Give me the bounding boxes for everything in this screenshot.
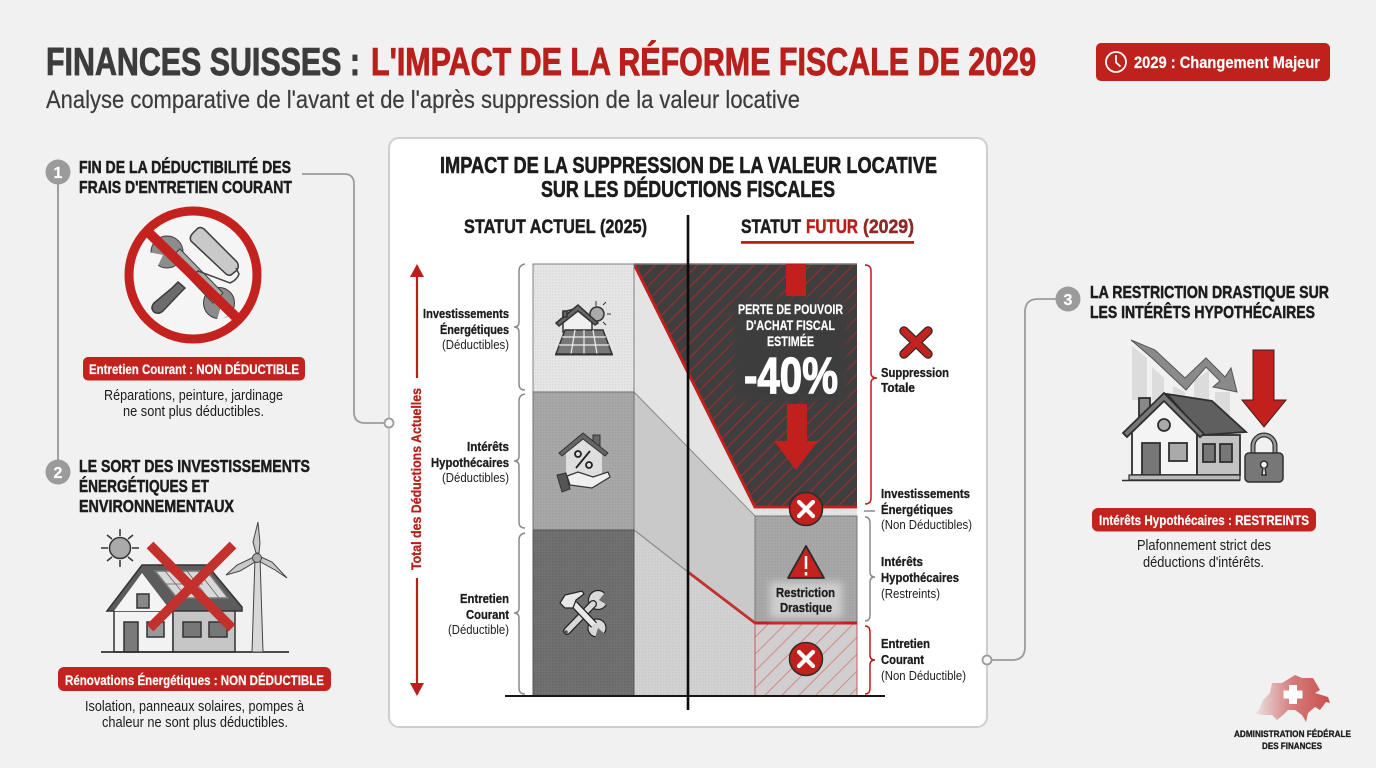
roller	[190, 228, 238, 275]
hammer with wrench end	[588, 619, 606, 637]
description step 2: chaleur ne sont plus déductibles.	[102, 715, 288, 731]
wrench with round end	[588, 590, 608, 610]
label: entretien courant futur: Entretien	[881, 636, 930, 651]
logo: administration federale des finances	[1234, 675, 1351, 752]
axis: total des deductions actuelles: Total des Déductions Actuelles	[409, 388, 424, 570]
icon: hammer and wrench	[560, 590, 612, 642]
column heading: statut futur	[741, 216, 914, 244]
icon: house with percent in hand	[557, 433, 610, 492]
step number 1	[46, 160, 70, 184]
panel: step 3 interets hypothecaires	[1056, 282, 1329, 571]
label: restriction drastique: Restriction	[776, 585, 835, 600]
panel: step 2 investissements energetiques	[46, 456, 331, 731]
label: interets hypothecaires futur	[881, 554, 959, 601]
badge: 2029 changement majeur	[1096, 43, 1330, 81]
flow band: entretien	[634, 530, 755, 696]
label: entretien courant futur: Courant	[881, 652, 925, 667]
icon: x badge investissements	[790, 492, 822, 526]
description step 2: Isolation, panneaux solaires, pompes à	[85, 699, 305, 715]
label: restriction drastique: Drastique	[780, 600, 832, 615]
left braces	[514, 264, 525, 694]
description step 3: déductions d'intérêts.	[1143, 555, 1264, 571]
connector from step 1 to chart	[302, 174, 394, 428]
title	[46, 40, 1036, 84]
falling arrow	[1131, 340, 1237, 392]
column heading: statut futur: STATUT	[741, 216, 801, 238]
description step 1	[104, 388, 283, 420]
column heading: statut actuel: STATUT ACTUEL (2025)	[464, 216, 647, 238]
right braces	[864, 265, 877, 694]
label: suppression totale	[881, 365, 949, 395]
timeline connector between steps 1 and 2	[57, 172, 59, 472]
subtitle: Analyse comparative de l'avant et de l'après suppression de la valeur locative	[46, 86, 800, 114]
heading step 3: LES INTÉRÊTS HYPOTHÉCAIRES	[1090, 301, 1315, 322]
badge: 2029 changement majeur: 2029 : Changement Majeur	[1134, 53, 1320, 72]
chart title: SUR LES DÉDUCTIONS FISCALES	[541, 175, 835, 202]
heading step 1: FRAIS D'ENTRETIEN COURANT	[79, 177, 292, 197]
panel: central chart	[389, 138, 987, 727]
heading step 2: ENVIRONNEMENTAUX	[79, 496, 234, 516]
heading step 1: FIN DE LA DÉDUCTIBILITÉ DES	[79, 156, 291, 177]
flow band: investissements	[634, 264, 755, 516]
title: FINANCES SUISSES :	[46, 41, 360, 84]
label: investissements energetiques actuel: (Déductibles)	[442, 337, 509, 352]
label: entretien courant futur	[881, 636, 966, 683]
icon: swiss map with cross	[1255, 675, 1330, 722]
logo: administration federale des finances: DES FINANCES	[1262, 741, 1322, 752]
red reduction line	[688, 572, 755, 623]
label: interets hypothecaires futur: Intérêts	[881, 554, 923, 569]
icon: house with falling chart and lock	[1122, 340, 1286, 482]
title: L'IMPACT DE LA RÉFORME FISCALE DE 2029	[371, 40, 1036, 84]
label: investissements energetiques futur: Investissements	[881, 486, 970, 501]
column heading: statut futur: (2029)	[863, 216, 914, 238]
padlock	[1245, 435, 1283, 482]
label: investissements energetiques futur	[881, 486, 972, 532]
label: interets hypothecaires futur: Hypothécaires	[881, 570, 959, 585]
label: restriction drastique	[776, 585, 835, 615]
column heading: statut futur: FUTUR	[806, 216, 858, 238]
label: interets hypothecaires actuel: Intérêts	[467, 439, 509, 454]
step number 1: 1	[54, 165, 63, 182]
pill: interets hypothecaires restreints: Intérêts Hypothécaires : RESTREINTS	[1099, 512, 1309, 528]
description step 2	[85, 699, 305, 731]
label: interets hypothecaires actuel	[431, 439, 509, 485]
chart baseline	[505, 695, 885, 697]
background bars	[1132, 346, 1230, 415]
pill: interets hypothecaires restreints	[1092, 508, 1316, 532]
icon: house with solar panel	[555, 301, 613, 354]
sun	[101, 529, 139, 567]
icon: red cross suppression	[904, 331, 928, 354]
step number 3: 3	[1064, 292, 1073, 309]
label: investissements energetiques futur: (Non Déductibles)	[881, 517, 972, 532]
axis: total des deductions actuelles	[409, 264, 424, 696]
heading step 2: ÉNERGÉTIQUES ET	[79, 475, 209, 496]
pill: renovations energetiques non deductible: Rénovations Énergétiques : NON DÉDUCTIBLE	[65, 672, 324, 688]
label: entretien courant actuel: Courant	[466, 607, 510, 622]
description step 3: Plafonnement strict des	[1137, 538, 1271, 554]
red cross	[150, 545, 233, 628]
label: investissements energetiques actuel: Énergétiques	[440, 322, 509, 337]
label: entretien courant actuel	[448, 591, 510, 637]
label: investissements energetiques futur: Énergétiques	[881, 502, 953, 517]
callout: perte de pouvoir d'achat: PERTE DE POUVOIR	[738, 302, 843, 317]
loss wedge	[634, 264, 857, 507]
label: entretien courant actuel: (Déductible)	[448, 622, 509, 637]
pill: renovations energetiques non deductible	[58, 667, 331, 691]
red arrow	[1242, 350, 1286, 427]
panel: step 1 entretien courant	[46, 156, 305, 420]
wind turbine	[226, 522, 287, 652]
callout: perte de pouvoir d'achat: D'ACHAT FISCAL	[746, 318, 835, 333]
icon: warning triangle	[770, 546, 842, 618]
description step 1: ne sont plus déductibles.	[123, 404, 264, 420]
house	[107, 565, 242, 652]
house	[1123, 393, 1246, 480]
label: investissements energetiques actuel	[423, 306, 509, 352]
connector from chart to step 3	[982, 299, 1056, 664]
description step 3	[1137, 538, 1271, 571]
step number 2: 2	[54, 465, 63, 482]
chart title	[440, 152, 937, 202]
icon: prohibited tools	[129, 211, 257, 339]
callout: perte de pouvoir d'achat: ESTIMÉE	[767, 334, 814, 349]
stacked bar: statut futur	[755, 509, 857, 696]
heading step 2	[79, 456, 310, 516]
arrow: loss down	[774, 404, 818, 470]
icon: x badge entretien	[790, 642, 822, 676]
label: investissements energetiques actuel: Investissements	[423, 306, 509, 321]
pill: entretien courant non deductible: Entretien Courant : NON DÉDUCTIBLE	[89, 361, 299, 377]
description step 1: Réparations, peinture, jardinage	[104, 388, 283, 404]
callout: perte de pouvoir d'achat	[733, 264, 847, 470]
label: suppression totale: Totale	[881, 380, 915, 395]
heading step 2: LE SORT DES INVESTISSEMENTS	[79, 456, 310, 476]
label: interets hypothecaires actuel: (Déductibles)	[442, 470, 509, 485]
label: suppression totale: Suppression	[881, 365, 949, 380]
stacked bar: statut actuel	[533, 264, 634, 696]
pill: entretien courant non deductible	[83, 357, 305, 380]
label: interets hypothecaires actuel: Hypothécaires	[431, 455, 509, 470]
panel background	[389, 138, 987, 727]
screwdriver	[152, 282, 185, 313]
step number 2	[46, 460, 70, 484]
step number 3	[1056, 286, 1080, 312]
icon: house with solar panels crossed out	[101, 522, 289, 652]
label: entretien courant futur: (Non Déductible)	[881, 668, 966, 683]
label: interets hypothecaires futur: (Restreints)	[881, 586, 940, 601]
logo: administration federale des finances: ADMINISTRATION FÉDÉRALE	[1234, 729, 1351, 740]
flow band: interets	[634, 392, 755, 623]
label: entretien courant actuel: Entretien	[460, 591, 509, 606]
icon: clock	[1106, 52, 1126, 72]
vertical divider	[687, 215, 689, 710]
heading step 3	[1090, 282, 1329, 322]
heading step 1	[79, 156, 292, 197]
callout: perte de pouvoir d'achat: -40%	[744, 347, 838, 404]
wrench	[151, 236, 183, 268]
chart title: IMPACT DE LA SUPPRESSION DE LA VALEUR LOCATIVE	[440, 152, 937, 178]
